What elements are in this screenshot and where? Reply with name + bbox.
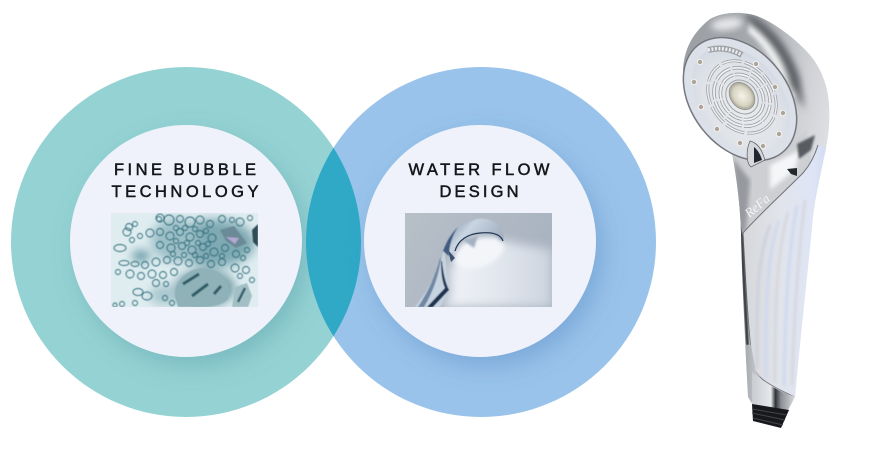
spray nozzle rings [694,47,790,147]
center nozzle [724,77,760,115]
spray mist [444,240,552,307]
neck below the face [732,154,810,232]
inner disc [70,125,302,357]
heading: water flow design [408,161,550,201]
threaded connector [752,404,789,428]
large bubble [175,224,258,307]
circle ring: blue [306,67,656,417]
collar [752,372,797,412]
head shell [443,219,504,254]
heading: water flow design: DESIGN [440,183,518,201]
heading: fine bubble technology [112,161,258,201]
heading: fine bubble technology: TECHNOLOGY [112,183,258,201]
top vent arc [708,49,742,55]
heading: fine bubble technology: FINE BUBBLE [114,161,256,179]
panel: water flow design [306,67,656,417]
panel: fine bubble technology [11,67,361,417]
overlap lens [306,148,361,336]
body silhouette [680,10,835,412]
shower head product [682,12,830,428]
pins [691,59,786,149]
handle [415,219,504,307]
handle left dark edge [739,222,749,345]
head rim [455,233,503,251]
heading: water flow design: WATER FLOW [408,161,550,179]
photo: shower spray [405,213,552,307]
inner disc [364,125,596,357]
brand script: ReFa [741,190,773,221]
face plate [659,14,821,184]
switch lever [747,141,765,167]
white grip panel [744,145,826,388]
circle ring: teal [11,67,361,417]
photo: bubbles [111,213,258,307]
